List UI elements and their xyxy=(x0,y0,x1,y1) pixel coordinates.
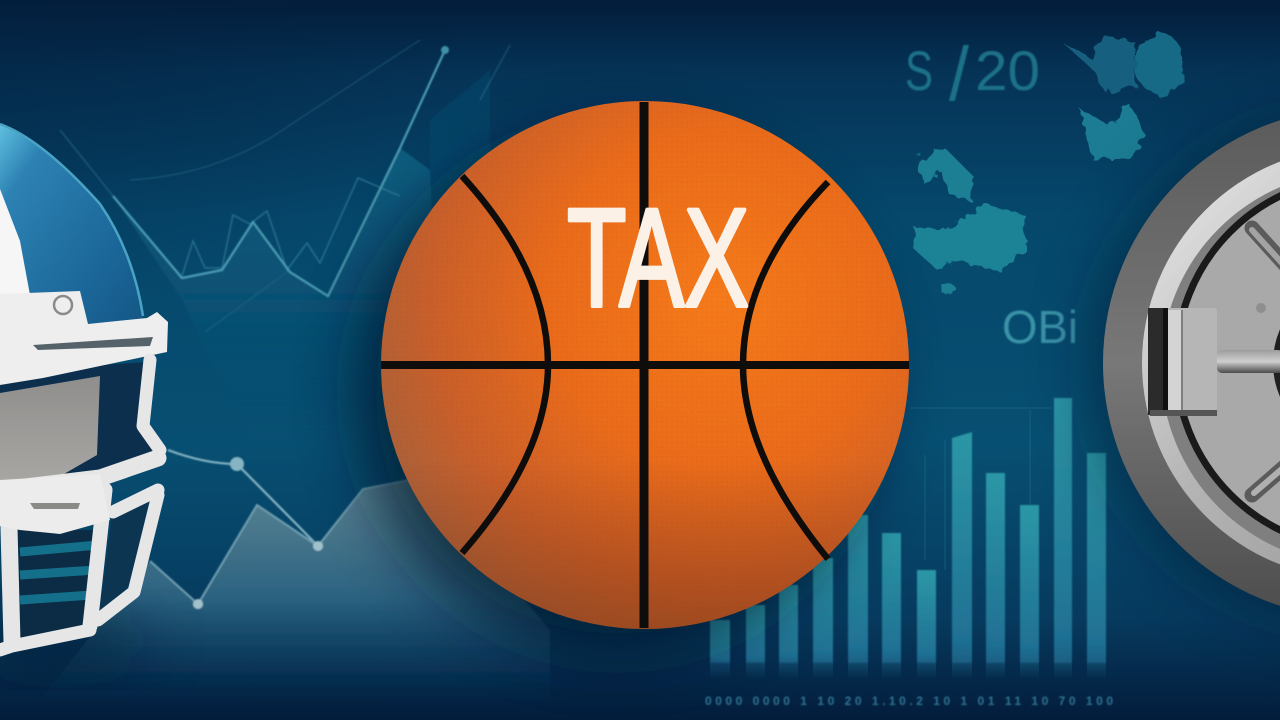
shadow behind basketball xyxy=(356,130,880,654)
line chart: upper left xyxy=(60,40,510,440)
basketball xyxy=(381,101,909,629)
shadow behind helmet xyxy=(0,612,150,668)
faded label: upper right xyxy=(905,32,1040,117)
faded label: upper right: S xyxy=(905,39,933,102)
abstract teal splotches xyxy=(912,33,1184,294)
bar chart: lower right xyxy=(705,398,1113,708)
bar chart axis labels: 0000 0000 1 10 20 1.10.2 10 1 01 11 10 70 100 xyxy=(705,694,1113,708)
area chart: lower left xyxy=(40,450,550,700)
vault hub xyxy=(1273,278,1280,448)
vault locking rods xyxy=(1252,228,1280,495)
faded label: OBi: OBi xyxy=(1002,301,1078,353)
icon: bank vault door xyxy=(1103,108,1280,618)
faded label: upper right: 20 xyxy=(975,39,1040,102)
ball label: TAX: TAX xyxy=(567,179,749,336)
vault latch xyxy=(1148,308,1217,416)
icon: football helmet xyxy=(0,124,168,650)
shadow behind vault xyxy=(1089,112,1280,624)
faded label: upper right: / xyxy=(949,32,970,117)
